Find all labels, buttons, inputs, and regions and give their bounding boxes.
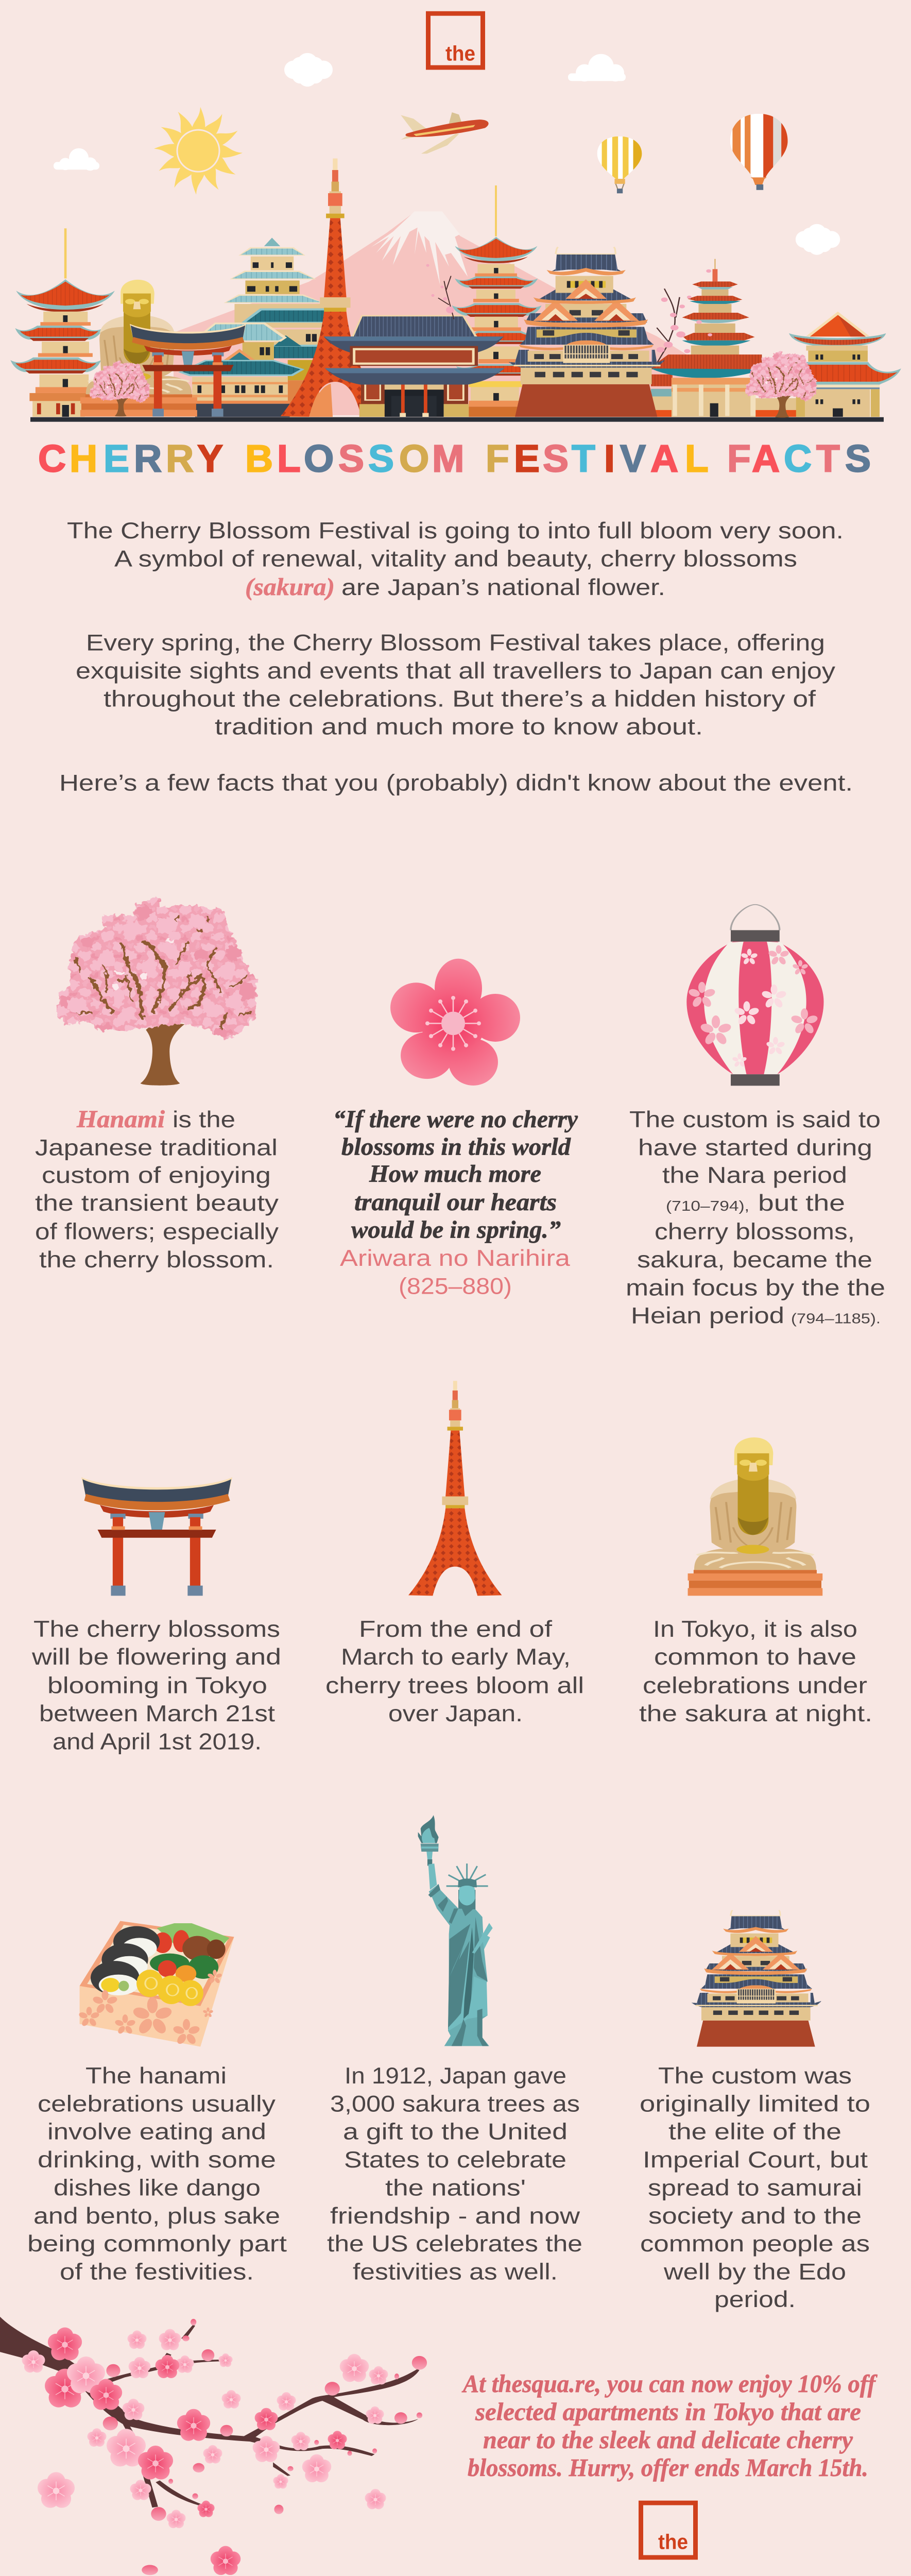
Tokyo tower	[281, 159, 390, 417]
intro paragraph two	[76, 630, 836, 740]
title: I	[604, 437, 615, 480]
quote: “If there were no cherry	[333, 1106, 578, 1133]
title: A	[752, 437, 780, 480]
cloud four	[796, 224, 840, 255]
fact: gift to the US: friendship - and now	[330, 2203, 580, 2229]
branch limbs	[0, 2317, 419, 2507]
fact: food and drink: of the festivities.	[60, 2259, 254, 2285]
logo: the square bottom	[641, 2503, 695, 2557]
red pagoda behind gate	[452, 185, 544, 417]
fact: food and drink: and bento, plus sake	[33, 2203, 280, 2229]
logo: the square top: the	[445, 42, 475, 65]
fact: gift to the US: the US celebrates the	[327, 2231, 582, 2257]
fact: imperial court origins: society and to the	[648, 2203, 862, 2229]
fact: Nara and Heian periods: the Nara period	[662, 1162, 847, 1188]
fact: food and drink: being commonly part	[27, 2231, 287, 2257]
title: E	[104, 437, 129, 480]
fact: Nara and Heian periods: sakura, became the	[637, 1247, 872, 1273]
intro paragraph three: Here’s a few facts that you (probably) didn't know about the event.	[59, 770, 853, 795]
quote: blossoms in this world	[341, 1133, 571, 1160]
icon: Buddha	[688, 1437, 822, 1596]
Osaka castle	[509, 247, 665, 417]
title: E	[514, 437, 540, 480]
logo: the square top	[428, 13, 483, 67]
icon: sun	[154, 107, 243, 195]
quote: (825–880)	[399, 1274, 512, 1299]
fact: gift to the US	[327, 2063, 582, 2285]
fact: hanami: Japanese traditional	[35, 1135, 278, 1160]
illustration: Japan skyline	[10, 159, 901, 422]
fact: Nara and Heian periods: (710–794),	[666, 1198, 749, 1214]
icon: paper lantern	[686, 905, 824, 1086]
fact: hanami: is the	[173, 1107, 235, 1132]
quote: How much more	[369, 1160, 541, 1188]
cloud one	[284, 53, 333, 87]
icon: plane	[401, 112, 489, 154]
fact: hanami	[35, 1106, 279, 1273]
fact: gift to the US: States to celebrate	[344, 2147, 566, 2173]
fact: Nara and Heian periods: but the	[758, 1190, 845, 1216]
right pavilion	[789, 312, 901, 417]
fact: imperial court origins	[640, 2063, 870, 2312]
fact: hanami: of flowers; especially	[35, 1219, 279, 1245]
cloud two	[568, 54, 626, 81]
fact: Nara and Heian periods	[626, 1107, 885, 1329]
fact: bloom across Japan	[325, 1616, 584, 1726]
blossoms	[22, 2328, 388, 2575]
intro paragraph two: tradition and much more to know about.	[215, 714, 703, 740]
fact: Nara and Heian periods: main focus by the the	[626, 1275, 885, 1300]
intro paragraph two: throughout the celebrations. But there’s a hidden history of	[104, 686, 816, 711]
title: R	[134, 437, 162, 480]
buds	[103, 2319, 427, 2575]
torii gate	[130, 324, 246, 417]
title: H	[70, 437, 97, 480]
icon: Tokyo tower	[408, 1381, 502, 1596]
fact: food and drink: The hanami	[85, 2063, 227, 2089]
icon: yellow balloon	[597, 137, 643, 193]
title: T	[816, 437, 840, 480]
icon: torii gate	[81, 1477, 232, 1596]
fact: hanami: custom of enjoying	[42, 1162, 271, 1188]
fact: Tokyo bloom dates: between March 21st	[39, 1701, 276, 1726]
fact: food and drink: dishes like dango	[54, 2175, 261, 2200]
fact: food and drink: involve eating and	[47, 2119, 266, 2145]
intro paragraph two: exquisite sights and events that all travellers to Japan can enjoy	[76, 658, 836, 684]
teal pagoda	[178, 238, 337, 417]
callout: offer: selected apartments in Tokyo that are	[475, 2398, 861, 2426]
fact: imperial court origins: common people as	[640, 2231, 870, 2257]
fact: imperial court origins: period.	[714, 2286, 796, 2312]
title: F	[727, 437, 751, 480]
fact: bloom across Japan: From the end of	[359, 1616, 553, 1642]
fact: gift to the US: the nations'	[385, 2175, 526, 2200]
quote	[333, 1106, 578, 1299]
callout: offer: near to the sleek and delicate cherry	[483, 2426, 853, 2454]
fact: food and drink	[27, 2063, 287, 2285]
fact: night celebrations	[639, 1616, 872, 1726]
sky decorations	[54, 53, 840, 255]
fact: imperial court origins: The custom was	[658, 2063, 852, 2089]
intro paragraph two: Every spring, the Cherry Blossom Festival takes place, offering	[86, 630, 825, 656]
fact: Nara and Heian periods: cherry blossoms,	[655, 1219, 855, 1245]
quote: Ariwara no Narihira	[340, 1245, 570, 1271]
fact: gift to the US: a gift to the United	[343, 2119, 568, 2145]
illustration: cherry blossom branch	[0, 2317, 427, 2575]
fact: imperial court origins: Imperial Court, but	[643, 2147, 868, 2173]
title: V	[620, 437, 646, 480]
fact: night celebrations: common to have	[654, 1644, 856, 1670]
title: L	[277, 437, 301, 480]
fact: Nara and Heian periods: The custom is said to	[629, 1107, 881, 1132]
fact: Tokyo bloom dates: will be flowering and	[31, 1644, 281, 1670]
fact: food and drink: celebrations usually	[38, 2091, 276, 2116]
fact: night celebrations: celebrations under	[643, 1673, 867, 1698]
ground bar	[30, 417, 884, 422]
quote: tranquil our hearts	[354, 1189, 557, 1216]
fact: imperial court origins: well by the Edo	[663, 2259, 846, 2285]
fact: hanami: Hanami	[76, 1106, 165, 1133]
fact: bloom across Japan: cherry trees bloom all	[325, 1673, 584, 1698]
right cherry tree	[745, 351, 817, 418]
right tiered pagoda	[650, 259, 799, 417]
temple gate	[310, 264, 505, 417]
fact: Tokyo bloom dates: blooming in Tokyo	[47, 1673, 267, 1698]
intro paragraph one	[67, 518, 844, 601]
fact: Nara and Heian periods: (794–1185).	[791, 1311, 881, 1327]
Buddha statue	[80, 280, 197, 417]
intro paragraph one: are Japan’s national flower.	[341, 574, 665, 600]
fact: Tokyo bloom dates: and April 1st 2019.	[53, 1729, 262, 1754]
callout: offer: blossoms. Hurry, offer ends March 15th.	[468, 2454, 868, 2482]
fact: Nara and Heian periods: Heian period	[631, 1303, 784, 1329]
title: M	[432, 437, 464, 480]
icon: blossom	[390, 959, 520, 1086]
fact: hanami: the cherry blossom.	[39, 1247, 274, 1273]
icon: cherry tree	[57, 896, 256, 1086]
fact: hanami: the transient beauty	[35, 1190, 279, 1216]
intro paragraph one: A symbol of renewal, vitality and beauty, cherry blossoms	[114, 546, 797, 571]
intro paragraph one: (sakura)	[245, 573, 335, 601]
fact: imperial court origins: spread to samurai	[648, 2175, 862, 2200]
title: C	[38, 437, 66, 480]
title: T	[572, 437, 595, 480]
fact: night celebrations: the sakura at night.	[639, 1701, 872, 1726]
fact: Tokyo bloom dates	[31, 1616, 281, 1754]
fact: night celebrations: In Tokyo, it is also	[653, 1616, 857, 1642]
callout: offer	[461, 2370, 878, 2482]
intro paragraph one: The Cherry Blossom Festival is going to into full bloom very soon.	[67, 518, 844, 544]
title: L	[685, 437, 709, 480]
title: A	[650, 437, 678, 480]
title: S	[368, 437, 394, 480]
mount Fuji	[174, 211, 690, 415]
left cherry tree	[90, 360, 149, 417]
icon: bento box	[78, 1921, 234, 2047]
quote: would be in spring.”	[351, 1216, 561, 1244]
fact: Nara and Heian periods: have started during	[638, 1135, 872, 1160]
title: Y	[197, 437, 223, 480]
fact: gift to the US: 3,000 sakura trees as	[330, 2091, 580, 2116]
icon: orange balloon	[730, 114, 788, 190]
title: O	[399, 437, 429, 480]
title: F	[486, 437, 509, 480]
red pagoda left	[10, 228, 115, 417]
cloud three	[54, 148, 99, 171]
title: O	[304, 437, 334, 480]
title: C	[784, 437, 812, 480]
fact: imperial court origins: originally limited to	[640, 2091, 870, 2116]
fact: imperial court origins: the elite of the	[668, 2119, 841, 2145]
fact: bloom across Japan: over Japan.	[388, 1701, 523, 1726]
title: R	[166, 437, 194, 480]
fact: gift to the US: festivities as well.	[353, 2259, 558, 2285]
icon: castle	[692, 1910, 821, 2047]
fact: gift to the US: In 1912, Japan gave	[345, 2063, 566, 2089]
title: S	[845, 437, 871, 480]
fact: food and drink: drinking, with some	[38, 2147, 276, 2173]
title: B	[245, 437, 273, 480]
fact: Tokyo bloom dates: The cherry blossoms	[33, 1616, 280, 1642]
fact: bloom across Japan: March to early May,	[341, 1644, 571, 1670]
title: S	[338, 437, 364, 480]
logo: the square bottom: the	[658, 2530, 688, 2554]
callout: offer: At thesqua.re, you can now enjoy 10% off	[461, 2370, 878, 2398]
title: S	[543, 437, 569, 480]
icon: Statue of Liberty	[418, 1815, 493, 2046]
